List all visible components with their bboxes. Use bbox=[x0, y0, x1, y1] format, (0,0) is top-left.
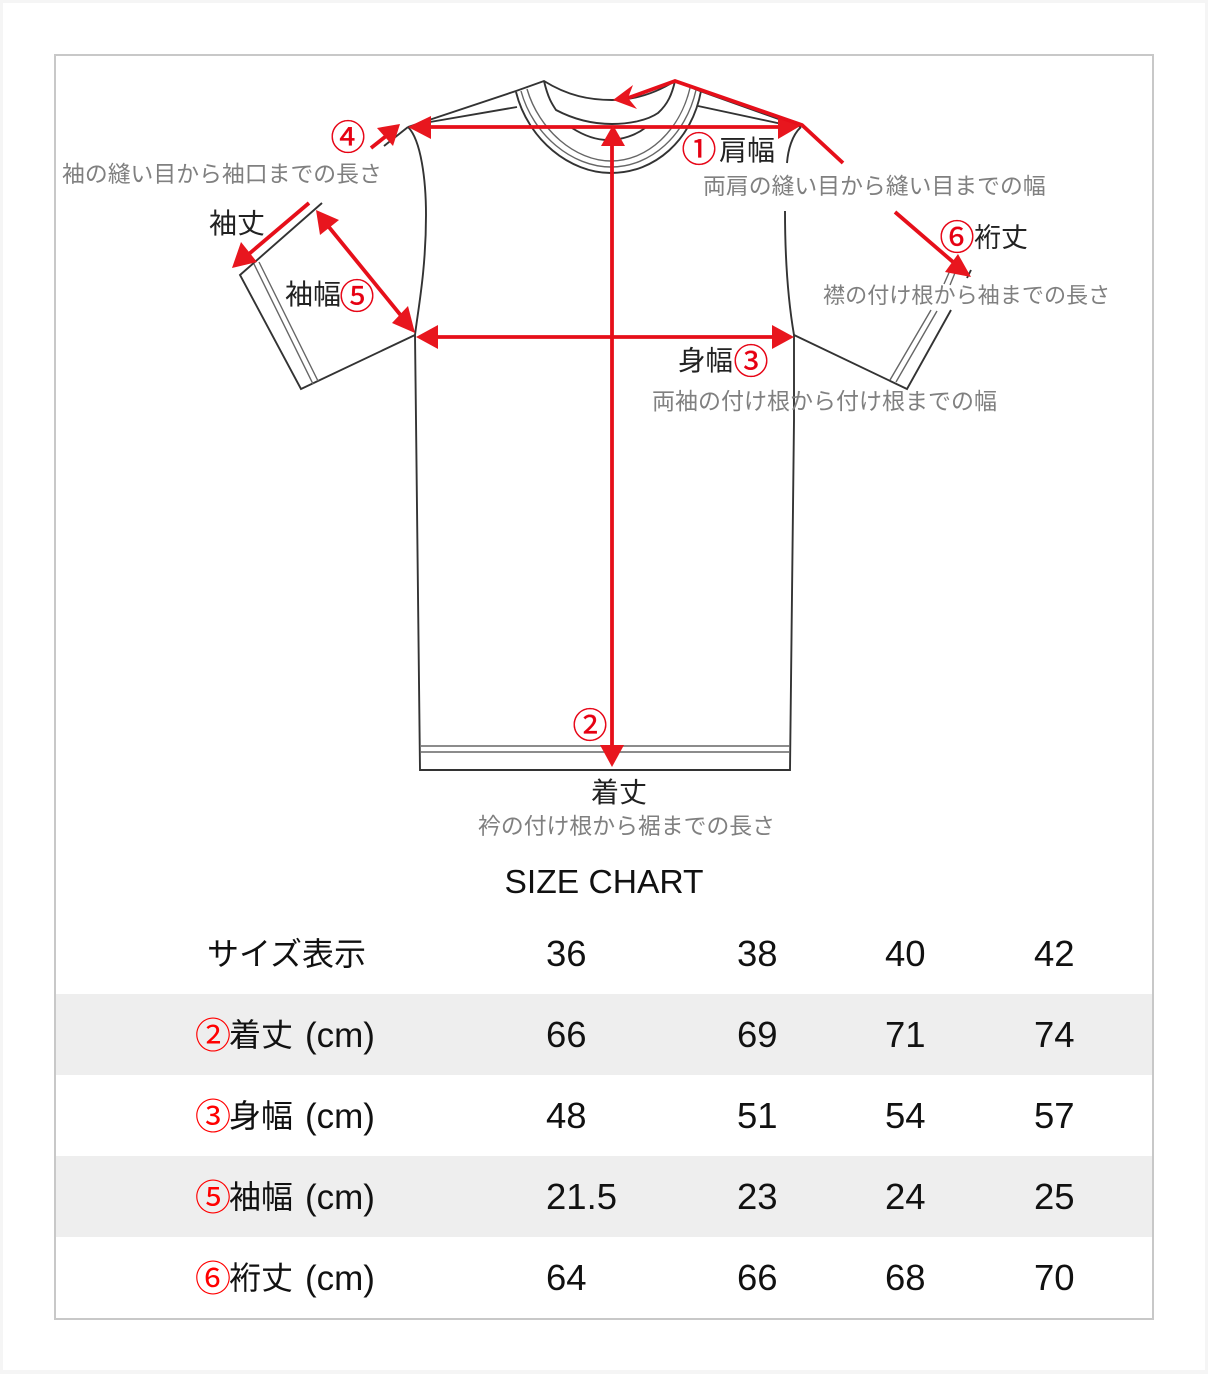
table row: body width: 54 bbox=[885, 1095, 926, 1136]
table row: body length: 74 bbox=[1034, 1014, 1075, 1055]
label: sleeve length bbox=[62, 119, 382, 239]
table row: body length bbox=[195, 1014, 1075, 1056]
table row: sleeve width: 23 bbox=[737, 1176, 778, 1217]
table row: body length: 69 bbox=[737, 1014, 778, 1055]
label: body length: 着丈 bbox=[591, 777, 647, 808]
arrow 4: sleeve length bbox=[232, 124, 400, 268]
table row: body width: ③ bbox=[195, 1096, 231, 1137]
arrow 2: body length bbox=[600, 125, 625, 767]
table row: body length: 着丈 bbox=[229, 1017, 293, 1053]
label: sleeve length: 袖丈 bbox=[209, 208, 265, 239]
heading: size chart: SIZE CHART bbox=[504, 864, 704, 901]
table row: sizes: 40 bbox=[885, 933, 926, 974]
table row: sleeve width: (cm) bbox=[305, 1178, 375, 1217]
table row: body length: (cm) bbox=[305, 1016, 375, 1055]
table row: sleeve width: 25 bbox=[1034, 1176, 1075, 1217]
table row: body length: ② bbox=[195, 1015, 231, 1056]
label: sleeve length: 袖の縫い目から袖口までの長さ bbox=[62, 161, 382, 187]
table row: sleeve width bbox=[195, 1176, 1075, 1218]
arrow 3: body width bbox=[416, 325, 794, 349]
table row: sizes: 38 bbox=[737, 933, 778, 974]
label: shoulder width: 肩幅 bbox=[719, 135, 775, 166]
t-shirt outline diagram bbox=[240, 81, 971, 770]
table row: yuki length: (cm) bbox=[305, 1259, 375, 1298]
label: body width: ③ bbox=[733, 343, 769, 382]
label: yuki length bbox=[823, 219, 1110, 308]
label: shoulder width: 両肩の縫い目から縫い目までの幅 bbox=[703, 173, 1046, 199]
label: sleeve width: ⑤ bbox=[339, 278, 375, 317]
table row: sizes bbox=[207, 933, 1075, 974]
table row: sleeve width: 21.5 bbox=[546, 1176, 617, 1217]
arrow 6: yuki length bbox=[613, 81, 971, 277]
table row: body width: 身幅 bbox=[229, 1098, 293, 1134]
label: body length: ② bbox=[572, 707, 608, 746]
table row: sleeve width: ⑤ bbox=[195, 1177, 231, 1218]
table row: yuki length: 70 bbox=[1034, 1257, 1075, 1298]
label: body width: 身幅 bbox=[678, 345, 733, 376]
label: body width: 両袖の付け根から付け根までの幅 bbox=[652, 388, 997, 414]
label: shoulder width bbox=[681, 131, 1046, 199]
label: shoulder width: ① bbox=[681, 131, 717, 170]
label: yuki length: 裄丈 bbox=[974, 223, 1028, 253]
table row: yuki length: 64 bbox=[546, 1257, 587, 1298]
table row: yuki length: 68 bbox=[885, 1257, 926, 1298]
label: body length bbox=[478, 707, 775, 839]
table row: body length: 71 bbox=[885, 1014, 926, 1055]
table row: body width bbox=[195, 1095, 1075, 1137]
table row: sizes: 36 bbox=[546, 933, 587, 974]
table row: body width: 57 bbox=[1034, 1095, 1075, 1136]
size table bbox=[56, 933, 1152, 1299]
table row: yuki length: ⑥ bbox=[195, 1258, 231, 1299]
table row: sleeve width: 袖幅 bbox=[229, 1179, 293, 1215]
table row: yuki length: 66 bbox=[737, 1257, 778, 1298]
label: body width bbox=[652, 343, 997, 414]
label: yuki length: ⑥ bbox=[939, 219, 975, 258]
arrow 5: sleeve width bbox=[316, 210, 415, 333]
label: sleeve width: 袖幅 bbox=[285, 279, 341, 310]
label: body length: 衿の付け根から裾までの長さ bbox=[478, 813, 775, 839]
table row: sizes: サイズ表示 bbox=[207, 936, 366, 972]
arrow 1: shoulder width bbox=[408, 115, 802, 139]
label: sleeve width bbox=[285, 278, 375, 317]
table row: sleeve width: 24 bbox=[885, 1176, 926, 1217]
table row: sizes: 42 bbox=[1034, 933, 1075, 974]
table row: body width: (cm) bbox=[305, 1097, 375, 1136]
label: sleeve length: ④ bbox=[330, 119, 366, 158]
table row: body length: 66 bbox=[546, 1014, 587, 1055]
table row: yuki length: 裄丈 bbox=[229, 1260, 293, 1296]
table row: body width: 48 bbox=[546, 1095, 587, 1136]
label: yuki length: 襟の付け根から袖までの長さ bbox=[823, 283, 1110, 308]
table row: body width: 51 bbox=[737, 1095, 778, 1136]
table row: yuki length bbox=[195, 1257, 1075, 1299]
